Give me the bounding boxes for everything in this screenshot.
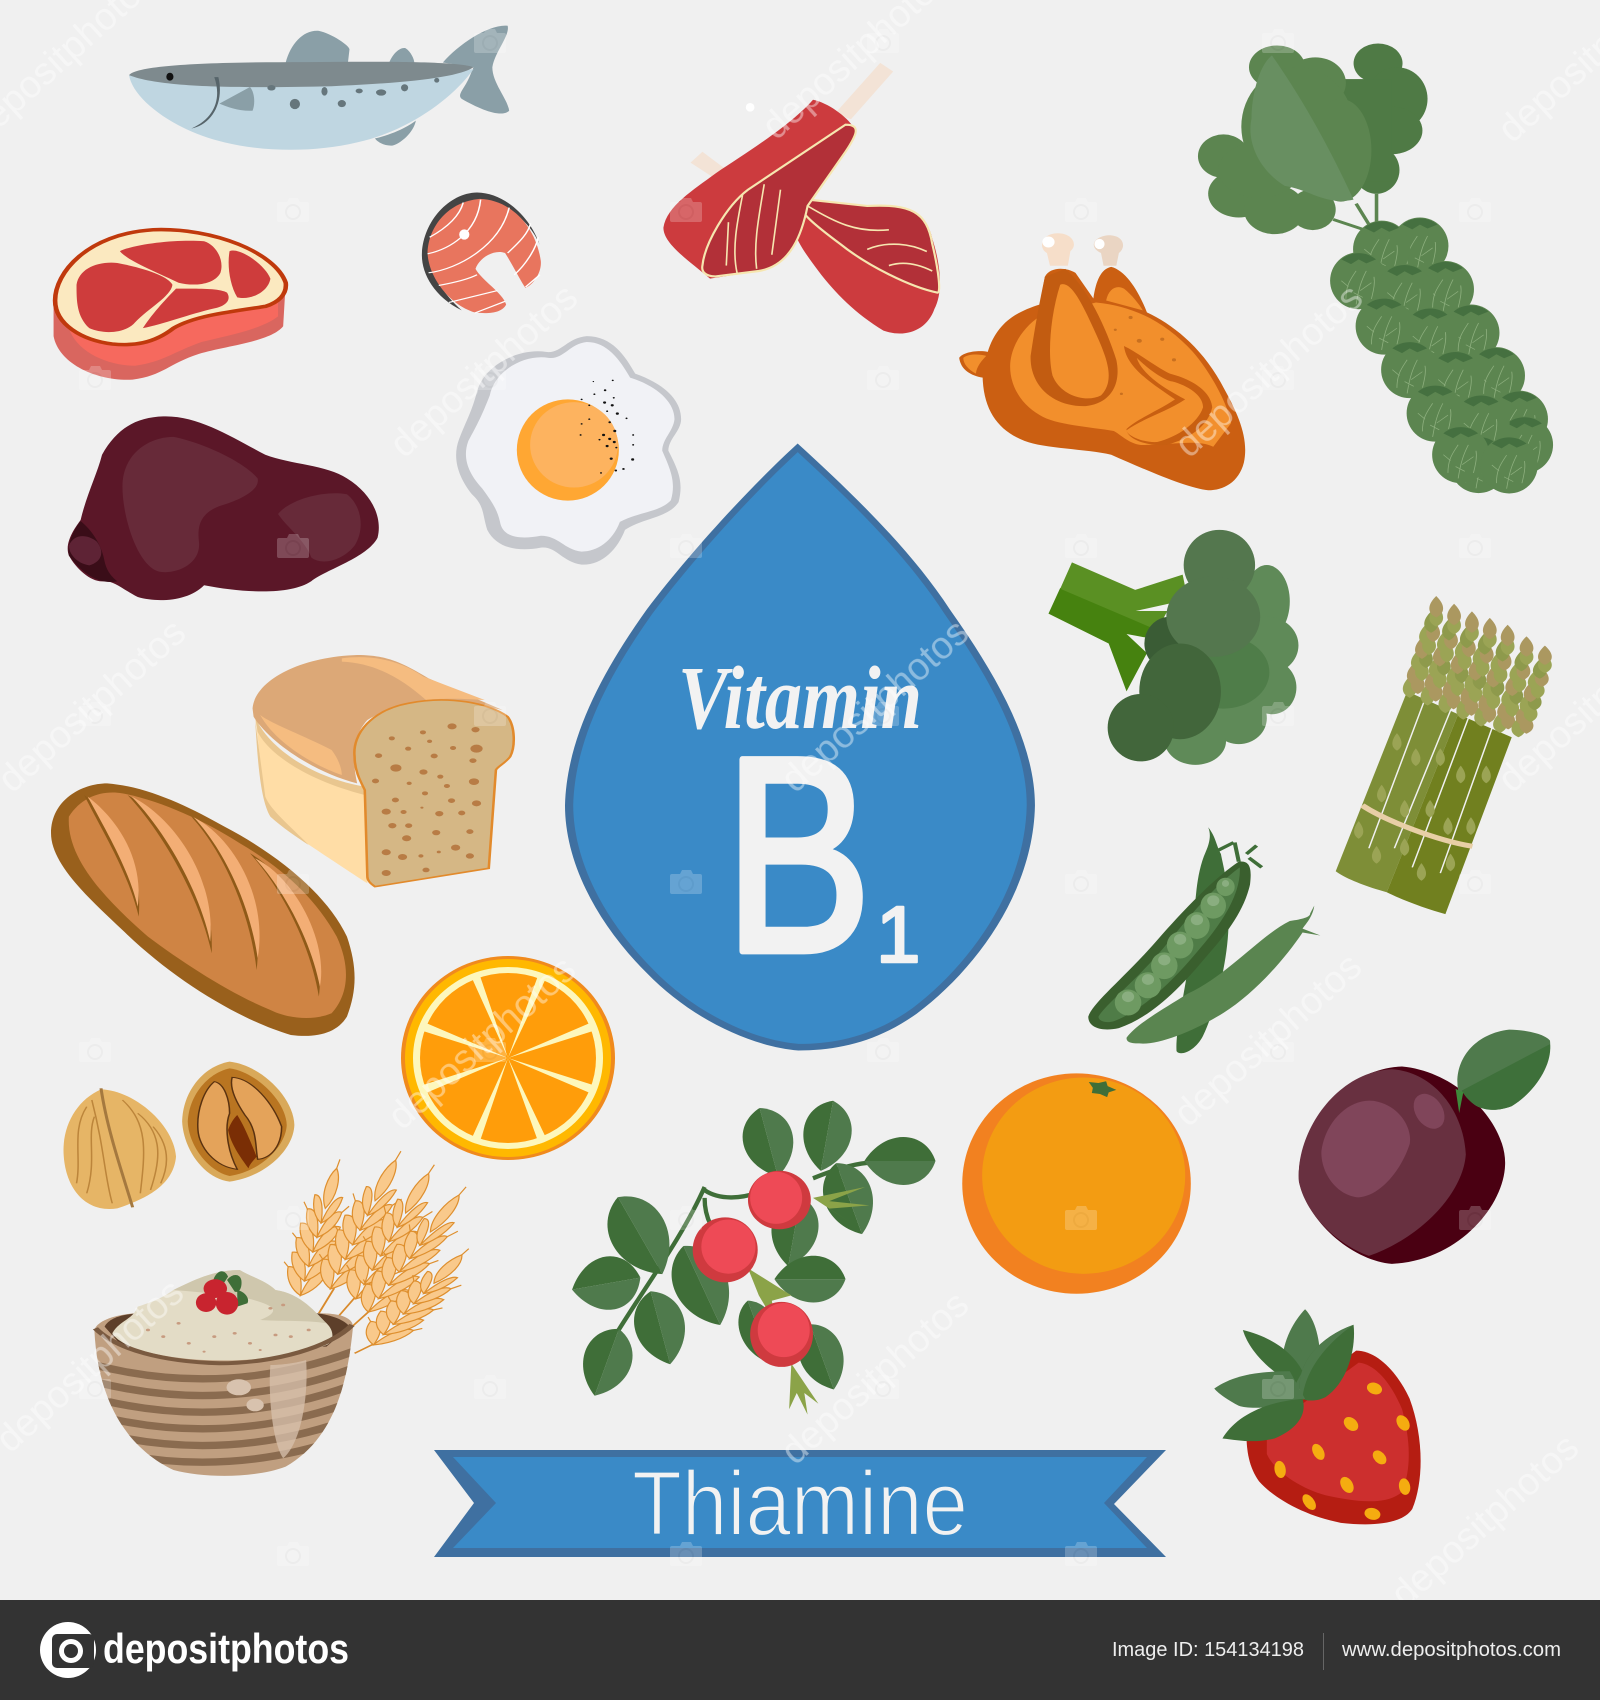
ribbon banner: Thiamine [434, 1450, 1166, 1557]
food: loaf of bread [253, 655, 514, 887]
watermark camera icons [79, 29, 1491, 1566]
footer logo text: depositphotos [103, 1625, 349, 1672]
footer bar [0, 1600, 1600, 1700]
watermark text: depositphotos [773, 611, 977, 801]
food: rose hip branch [567, 1097, 935, 1415]
heading: Vitamin: Vitamin [678, 649, 922, 748]
watermark text: depositphotos [1167, 276, 1371, 466]
food: fish [129, 26, 509, 150]
drop shape [565, 443, 1035, 1050]
vitamin drop [565, 443, 1035, 1050]
watermark text: depositphotos [1383, 1426, 1587, 1616]
food: whole orange [962, 1073, 1191, 1294]
watermark text: depositphotos [1166, 945, 1370, 1135]
footer logo icon [40, 1622, 96, 1678]
food: lamb chops [663, 63, 940, 333]
heading: B: B [724, 700, 872, 1011]
watermark text: depositphotos [382, 276, 586, 466]
food: baguette [51, 783, 355, 1036]
food: strawberry [1214, 1309, 1421, 1524]
food: wheat ears [275, 1148, 495, 1353]
food: salmon steak [422, 193, 541, 313]
heading: subscript 1: 1 [876, 890, 920, 979]
food: plum [1299, 1030, 1550, 1264]
food: fried egg [456, 336, 681, 565]
banner text: Thiamine [632, 1453, 968, 1555]
footer image id: Image ID: 154134198 [1112, 1639, 1304, 1661]
food: green peas [1088, 827, 1320, 1053]
food: asparagus bundle [1336, 596, 1552, 914]
watermark text: depositphotos [773, 1283, 977, 1473]
footer url: www.depositphotos.com [1341, 1639, 1561, 1661]
food: beef steak [54, 230, 286, 380]
food: brussels sprouts stalk [1198, 43, 1553, 493]
food: liver [68, 416, 379, 600]
watermark text: depositphotos [380, 948, 584, 1138]
food: orange slice [401, 956, 615, 1160]
food: walnuts [63, 1062, 294, 1209]
food: roast chicken [959, 233, 1245, 490]
food: broccoli [1048, 530, 1298, 765]
food: porridge bowl [94, 1270, 353, 1476]
